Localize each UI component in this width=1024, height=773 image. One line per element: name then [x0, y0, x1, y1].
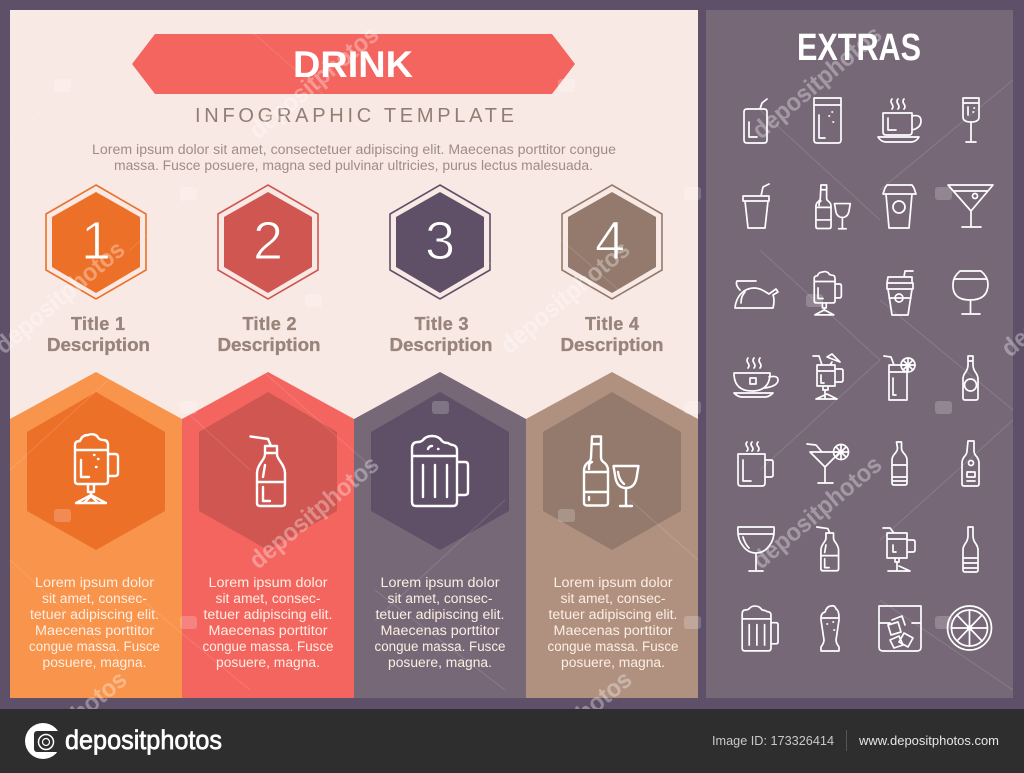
text block: tetuer adipiscing elit.: [30, 607, 159, 622]
step 1 title: Title 1: [71, 314, 125, 334]
text block: [374, 575, 506, 670]
icon: large wine glass: [738, 527, 774, 571]
intro text: massa. Fusce posuere, magna sed pulvinar ultricies, purus lectus malesuada.: [114, 158, 593, 173]
icon: pilsner glass: [821, 606, 839, 651]
icon: coffee cup: [878, 99, 921, 142]
intro text: [92, 142, 616, 173]
step 1 hexagon: 1: [81, 211, 111, 271]
column 1: [10, 372, 182, 698]
text block: Lorem ipsum dolor: [380, 575, 500, 590]
text block: sit amet, consec-: [42, 591, 147, 606]
icon: bottle with stripes: [892, 442, 907, 485]
step 4 title: [560, 314, 664, 355]
icon: hot mug: [738, 442, 773, 486]
icon: martini: [948, 185, 993, 227]
text block: Maecenas porttitor: [208, 623, 328, 638]
icon: cappuccino mug: [75, 434, 118, 503]
text block: posuere, magna.: [561, 655, 665, 670]
text block: posuere, magna.: [388, 655, 492, 670]
icon: kettle: [735, 281, 778, 308]
icon: tea cup: [734, 358, 778, 397]
step 2 hexagon: 2: [253, 211, 283, 271]
icon: citrus slice: [948, 606, 992, 650]
icon: depositphotos logo: [25, 723, 61, 759]
extras heading: EXTRAS: [797, 27, 921, 69]
icon: water glass: [814, 98, 841, 143]
column 2: [182, 372, 354, 698]
text block: tetuer adipiscing elit.: [204, 607, 332, 622]
step 4 title: Title 4: [585, 314, 639, 334]
logo wordmark: depositphotos: [65, 725, 222, 755]
step 3 title: Title 3: [414, 314, 468, 334]
title banner: [132, 34, 575, 94]
icon: mug with umbrella: [813, 354, 843, 399]
text block: congue massa. Fusce: [374, 639, 506, 654]
column 3: [354, 372, 526, 698]
step 3 hexagon: 3: [425, 211, 455, 271]
text block: tetuer adipiscing elit.: [376, 607, 504, 622]
title banner: DRINK: [293, 44, 413, 85]
icon: bottle and glass small: [816, 185, 850, 229]
text block: [202, 575, 334, 670]
icon: mug with straw: [883, 528, 915, 571]
panel: main: [10, 10, 698, 698]
icon: wine glass: [953, 271, 988, 314]
watermark: depositphotos: [244, 20, 384, 145]
text block: sit amet, consec-: [560, 591, 666, 606]
text block: sit amet, consec-: [216, 591, 320, 606]
step 1 title: Description: [47, 335, 150, 355]
step 3 title: Description: [390, 335, 492, 355]
step 2 title: Description: [218, 335, 320, 355]
icon: soda can: [744, 99, 767, 143]
step 2 hexagon: [218, 185, 318, 299]
column 4: [526, 372, 698, 698]
icon: beer mug: [412, 436, 468, 506]
step 4 hexagon: [562, 185, 662, 299]
text block: posuere, magna.: [216, 655, 320, 670]
text block: [29, 575, 160, 670]
watermark: depositphotos: [747, 450, 887, 575]
icon: cocktail with lemon: [807, 444, 840, 483]
watermark: depositphotos: [495, 235, 635, 360]
step 3 hexagon: [390, 185, 490, 299]
icon: whiskey glass: [879, 606, 921, 651]
icon: bottle with straw small: [817, 527, 839, 571]
text block: [548, 575, 678, 670]
text block: Maecenas porttitor: [35, 623, 155, 638]
icon: champagne flute: [963, 98, 979, 142]
icon: beer bottle with label: [963, 356, 978, 400]
image id: Image ID: 173326414: [712, 734, 834, 748]
panel: extras: [706, 10, 1013, 698]
intro text: Lorem ipsum dolor sit amet, consectetuer adipiscing elit. Maecenas porttitor congue: [92, 142, 616, 157]
step 1 title: [47, 314, 150, 355]
footer bar: [0, 709, 1024, 773]
step 4 hexagon: 4: [595, 211, 625, 271]
text block: congue massa. Fusce: [29, 639, 160, 654]
text block: congue massa. Fusce: [202, 639, 334, 654]
icon: bottle and wine glass: [584, 436, 638, 506]
icon: lemonade glass: [884, 356, 907, 400]
text block: Lorem ipsum dolor: [35, 575, 155, 590]
step 1 hexagon: [46, 185, 146, 299]
icon: cup with straw: [743, 184, 769, 228]
step 2 title: [218, 314, 320, 355]
icon: takeaway with straw: [887, 271, 913, 315]
icon: champagne bottle: [963, 527, 978, 572]
icon: cappuccino mug small: [814, 272, 841, 315]
text block: congue massa. Fusce: [548, 639, 678, 654]
step 2 title: Title 2: [242, 314, 296, 334]
text block: tetuer adipiscing elit.: [548, 607, 678, 622]
step 3 title: [390, 314, 492, 355]
website: www.depositphotos.com: [858, 734, 999, 748]
icon: takeaway coffee: [883, 185, 916, 228]
watermark: depositphotos: [747, 20, 887, 145]
text block: Maecenas porttitor: [380, 623, 500, 638]
watermark: depositphotos: [244, 450, 384, 575]
icon: bottle with badge: [962, 441, 979, 486]
icon: beer mug small: [742, 606, 778, 651]
subtitle: INFOGRAPHIC TEMPLATE: [195, 105, 514, 127]
text block: posuere, magna.: [42, 655, 146, 670]
text block: sit amet, consec-: [388, 591, 492, 606]
text block: Lorem ipsum dolor: [554, 575, 673, 590]
text block: Maecenas porttitor: [554, 623, 673, 638]
text block: Lorem ipsum dolor: [208, 575, 328, 590]
step 4 title: Description: [560, 335, 664, 355]
icon: bottle with straw: [250, 436, 285, 506]
